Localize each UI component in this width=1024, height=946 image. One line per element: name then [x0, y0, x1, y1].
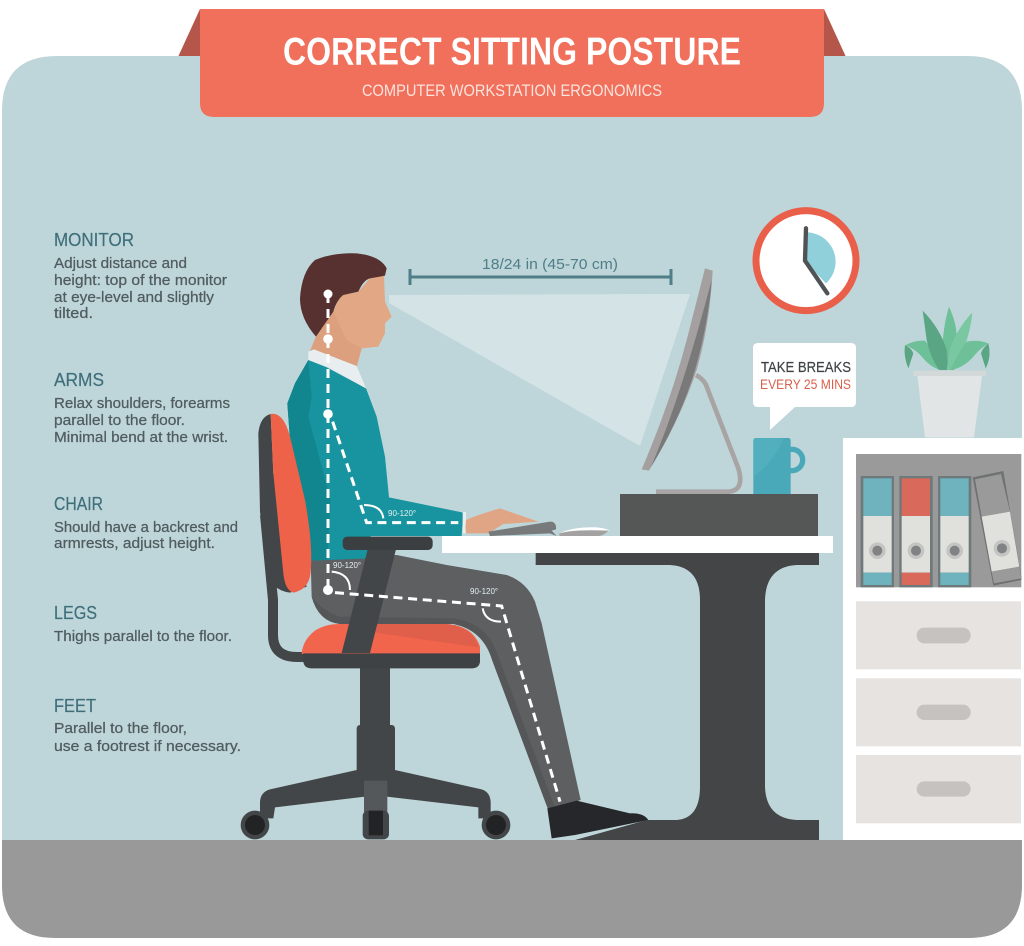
posture guide lines [323, 290, 560, 802]
text block: legs: LEGS [54, 603, 97, 623]
text block: feet: Parallel to the floor, [54, 721, 187, 737]
text block: monitor: height: top of the monitor [54, 273, 227, 289]
binder 1 [861, 476, 894, 587]
text block: monitor: MONITOR [54, 230, 134, 250]
text block: feet [54, 696, 241, 755]
monitor [642, 268, 740, 492]
text block: arms: ARMS [54, 370, 104, 390]
text block: feet: use a footrest if necessary. [54, 739, 241, 755]
monitor screen [642, 268, 713, 471]
distance measure [410, 256, 671, 285]
text block: monitor: tilted. [54, 306, 93, 322]
text block: chair: Should have a backrest and [54, 520, 238, 536]
chair base and column [241, 667, 510, 839]
text block: monitor [54, 230, 227, 322]
text block: monitor: at eye-level and slightly [54, 290, 215, 306]
text block: monitor: Adjust distance and [54, 256, 187, 272]
angle labels: 90-120° [333, 561, 361, 570]
text block: chair [54, 494, 238, 552]
monitor riser [620, 494, 818, 536]
subtitle: COMPUTER WORKSTATION ERGONOMICS [362, 81, 662, 100]
person [287, 253, 648, 838]
chair back support bar [265, 515, 340, 657]
banner ribbon tabs [178, 9, 846, 57]
mouse [559, 527, 610, 537]
text block: legs [54, 603, 232, 645]
drawer 3 [856, 755, 1021, 823]
desk top [442, 536, 833, 553]
joint dots [323, 290, 333, 595]
title: CORRECT SITTING POSTURE [283, 30, 741, 74]
backrest [258, 414, 311, 593]
sweater [287, 360, 463, 561]
drawer 2 [856, 678, 1021, 746]
drawers [856, 601, 1021, 823]
desk leg [536, 553, 819, 840]
title banner [200, 9, 824, 117]
trousers [311, 555, 581, 810]
leg dashed line [335, 593, 560, 802]
binder 4 tilted [973, 471, 1021, 586]
arm dashed line [333, 422, 458, 523]
text block: legs: Thighs parallel to the floor. [54, 629, 232, 645]
leaves [905, 307, 990, 370]
monitor stand [656, 375, 740, 492]
keyboard [488, 522, 557, 536]
angle labels: 90-120° [388, 509, 416, 518]
chair [241, 515, 510, 839]
distance measure: 18/24 in (45-70 cm) [482, 256, 618, 273]
speech bubble: take breaks [753, 343, 856, 430]
text block: arms: parallel to the floor. [54, 413, 185, 429]
binder 3 [938, 476, 971, 587]
collar [308, 349, 366, 388]
text block: chair: armrests, adjust height. [54, 536, 215, 552]
spine dashed line [326, 294, 330, 590]
text block: arms [54, 370, 230, 446]
text block: chair: CHAIR [54, 494, 103, 514]
shoe [547, 801, 648, 838]
armrest and post [342, 537, 433, 653]
chair seat [302, 624, 480, 668]
drawer 1 [856, 601, 1021, 669]
speech bubble: take breaks: EVERY 25 MINS [760, 377, 851, 392]
shelf unit [843, 438, 1022, 840]
text block: arms: Minimal bend at the wrist. [54, 430, 228, 446]
text block: arms: Relax shoulders, forearms [54, 396, 230, 412]
text block: feet: FEET [54, 696, 96, 716]
binders shelf [856, 454, 1021, 587]
angle labels [333, 509, 498, 596]
head and neck [310, 276, 392, 367]
hair [300, 253, 387, 337]
plant [905, 307, 990, 437]
coffee mug [753, 438, 803, 494]
hand [463, 508, 538, 533]
clock [756, 211, 856, 311]
floor [2, 840, 1022, 938]
binder 2 [899, 476, 933, 587]
vision cone [389, 294, 690, 446]
speech bubble: take breaks: TAKE BREAKS [761, 359, 851, 376]
pot [913, 371, 986, 437]
angle labels: 90-120° [470, 587, 498, 596]
